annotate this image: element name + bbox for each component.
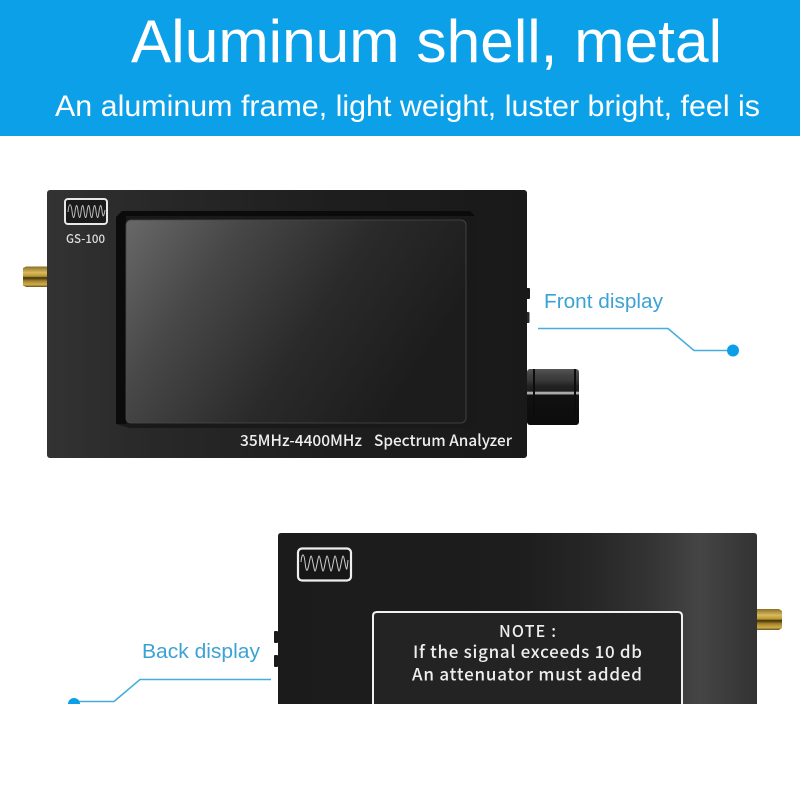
- callout: back display: [68, 641, 271, 704]
- icon: right SMA connector: [757, 609, 782, 630]
- screen bezel: [116, 211, 475, 428]
- device body: [47, 190, 527, 458]
- note heading: NOTE :: [499, 618, 556, 642]
- icon: rotary knob: [527, 369, 579, 425]
- frequency label: 35MHz-4400MHz: [240, 429, 362, 451]
- callout: front display: [538, 291, 739, 356]
- callout: back display: Back display: [142, 641, 260, 663]
- logo: waveform badge: [65, 199, 107, 224]
- callout: front display: Front display: [544, 291, 663, 313]
- screen: [126, 220, 466, 423]
- note box: [373, 612, 682, 704]
- logo: waveform badge: [298, 548, 351, 580]
- header banner: [0, 0, 800, 136]
- note line 1: If the signal exceeds 10 db: [413, 638, 642, 663]
- front device: [23, 190, 579, 458]
- back device: [274, 533, 782, 704]
- side buttons: [274, 631, 278, 667]
- subtitle: An aluminum frame, light weight, luster bright, feel is: [55, 90, 760, 123]
- note line 2: An attenuator must added: [412, 660, 642, 686]
- product label: Spectrum Analyzer: [374, 429, 513, 451]
- device body: [278, 533, 757, 704]
- side buttons: [526, 288, 530, 323]
- icon: left SMA connector: [23, 266, 47, 287]
- title: Aluminum shell, metal: [131, 8, 722, 75]
- model label: GS-100: [66, 230, 105, 247]
